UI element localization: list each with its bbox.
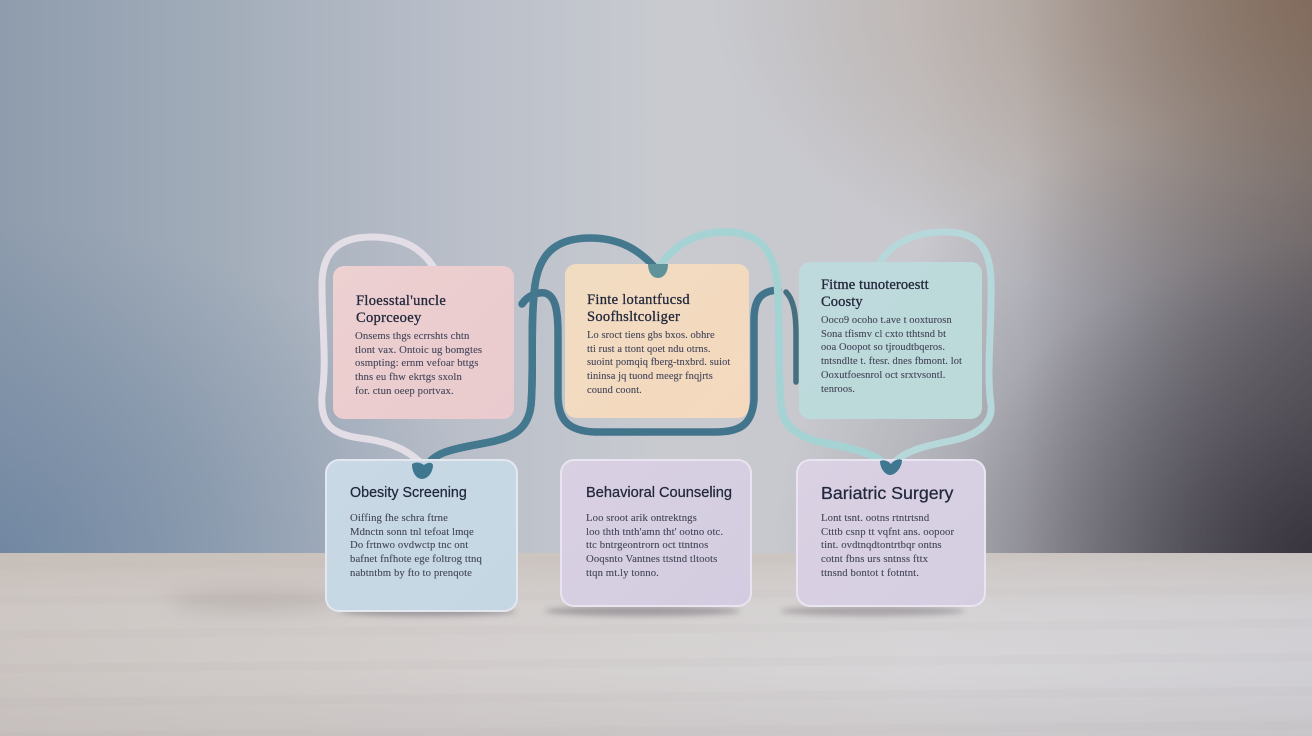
text: peach card body: suoint pomqiq fberg-tnxbrd. suiot: [587, 357, 730, 368]
text: Behavioral Counseling body: ttc bntrgeontrorn oct ttntnos: [586, 539, 708, 551]
background wall: [0, 0, 1312, 553]
panel: upper pink card: [333, 266, 514, 419]
text: pink card body: [355, 330, 482, 397]
heading: pink card: Coprceoey: [356, 310, 422, 326]
heading: peach card: Soofhsltcoliger: [587, 309, 680, 325]
text: Behavioral Counseling body: Ooqsnto Vantnes ttstnd tltoots: [586, 553, 717, 565]
text: Behavioral Counseling body: ttqn mt.ly tonno.: [586, 567, 659, 579]
text: Behavioral Counseling body: loo thth tnth'amn tht' ootno otc.: [586, 526, 723, 538]
text: Obesity Screening body: Oiffing fhe schra ftrne: [350, 512, 448, 524]
text: peach card body: [587, 330, 730, 396]
ribbon: teal link across upper cards: [522, 290, 778, 432]
text: Bariatric Surgery body: Ctttb csnp tt vqfnt ans. oopoor: [821, 526, 954, 538]
heading: Obesity Screening: Obesity Screening: [350, 485, 467, 501]
node: centre top: [648, 264, 668, 278]
heading: peach card: [587, 292, 690, 325]
text: Behavioral Counseling body: Loo sroot arik ontrektngs: [586, 512, 697, 524]
text: peach card body: cound coont.: [587, 385, 642, 396]
text: aqua card body: [821, 315, 962, 395]
panel: upper aqua card: [799, 262, 982, 419]
text: aqua card body: tntsndlte t. ftesr. dnes fbmont. lot: [821, 356, 962, 367]
text: Bariatric Surgery body: ttnsnd bontot t fotntnt.: [821, 567, 919, 579]
heading: aqua card: [821, 277, 929, 310]
heading: pink card: [356, 293, 446, 326]
heading: peach card: Finte lotantfucsd: [587, 292, 690, 308]
heading: pink card: Floesstal'uncle: [356, 293, 446, 309]
text: Obesity Screening body: Mdnctn sonn tnl tefoat lmqe: [350, 526, 474, 538]
panel: Obesity Screening card: [325, 459, 518, 612]
node: Obesity Screening heart: [412, 462, 433, 479]
text: aqua card body: Ooco9 ocoho t.ave t ooxturosn: [821, 315, 952, 326]
text: peach card body: tti rust a ttont qoet ndu otrns.: [587, 344, 711, 355]
text: Obesity Screening body: Do frtnwo ovdwctp tnc ont: [350, 539, 468, 551]
ribbon: teal arch over centre card: [426, 238, 657, 468]
shadow: left cast: [170, 590, 345, 612]
heading: Behavioral Counseling: Behavioral Counseling: [586, 485, 732, 501]
ribbon: aqua stem in front of link: [777, 280, 890, 468]
text: peach card body: tininsa jq tuond meegr fnqjrts: [587, 371, 713, 382]
ribbon: teal stem in front of first card: [426, 285, 535, 468]
text: aqua card body: ooa Ooopot so tjroudtbqeros.: [821, 342, 945, 353]
panel: Bariatric Surgery card: [796, 459, 986, 607]
ribbon: teal right stub: [786, 292, 796, 382]
ribbon: aqua right loop: [880, 232, 991, 466]
text: pink card body: thns eu fhw ekrtgs sxoln: [355, 371, 462, 383]
text: Bariatric Surgery body: [821, 512, 954, 579]
text: aqua card body: Ooxutfoesnrol oct srxtvsontl.: [821, 370, 945, 381]
text: Bariatric Surgery body: cotnt fbns urs sntnss fttx: [821, 553, 928, 565]
text: pink card body: for. ctun oeep portvax.: [355, 385, 454, 397]
text: aqua card body: Sona tfismv cl cxto tthtsnd bt: [821, 329, 946, 340]
text: pink card body: Onsems thgs ecrrshts chtn: [355, 330, 469, 342]
ribbon: pale pink loop: [322, 237, 434, 464]
ribbon: light aqua arch: [657, 232, 890, 468]
shadow: under centre card: [545, 606, 740, 616]
panel: Behavioral Counseling card: [560, 459, 752, 607]
text: aqua card body: tenroos.: [821, 384, 855, 395]
text: pink card body: osmpting: ernm vefoar bttgs: [355, 357, 479, 369]
text: Bariatric Surgery body: Lont tsnt. ootns rtntrtsnd: [821, 512, 929, 524]
heading: aqua card: Coosty: [821, 294, 863, 310]
panel: upper peach card: [565, 264, 749, 418]
shadow: under Obesity card: [340, 607, 516, 616]
wooden table: [0, 553, 1312, 736]
text: Obesity Screening body: nabtntbm by fto to prenqote: [350, 567, 472, 579]
text: Obesity Screening body: [350, 512, 482, 579]
node: Bariatric Surgery heart: [880, 459, 902, 475]
text: pink card body: tlont vax. Ontoic ug bomgtes: [355, 344, 482, 356]
text: Bariatric Surgery body: tint. ovdtnqdtontrtbqr ontns: [821, 539, 942, 551]
text: Obesity Screening body: bafnet fnfhote ege foltrog ttnq: [350, 553, 482, 565]
heading: aqua card: Fitme tunoteroestt: [821, 277, 929, 293]
text: peach card body: Lo sroct tiens gbs bxos. obhre: [587, 330, 715, 341]
heading: Bariatric Surgery: Bariatric Surgery: [821, 483, 953, 503]
text: Behavioral Counseling body: [586, 512, 723, 579]
shadow: under right card: [780, 606, 965, 616]
